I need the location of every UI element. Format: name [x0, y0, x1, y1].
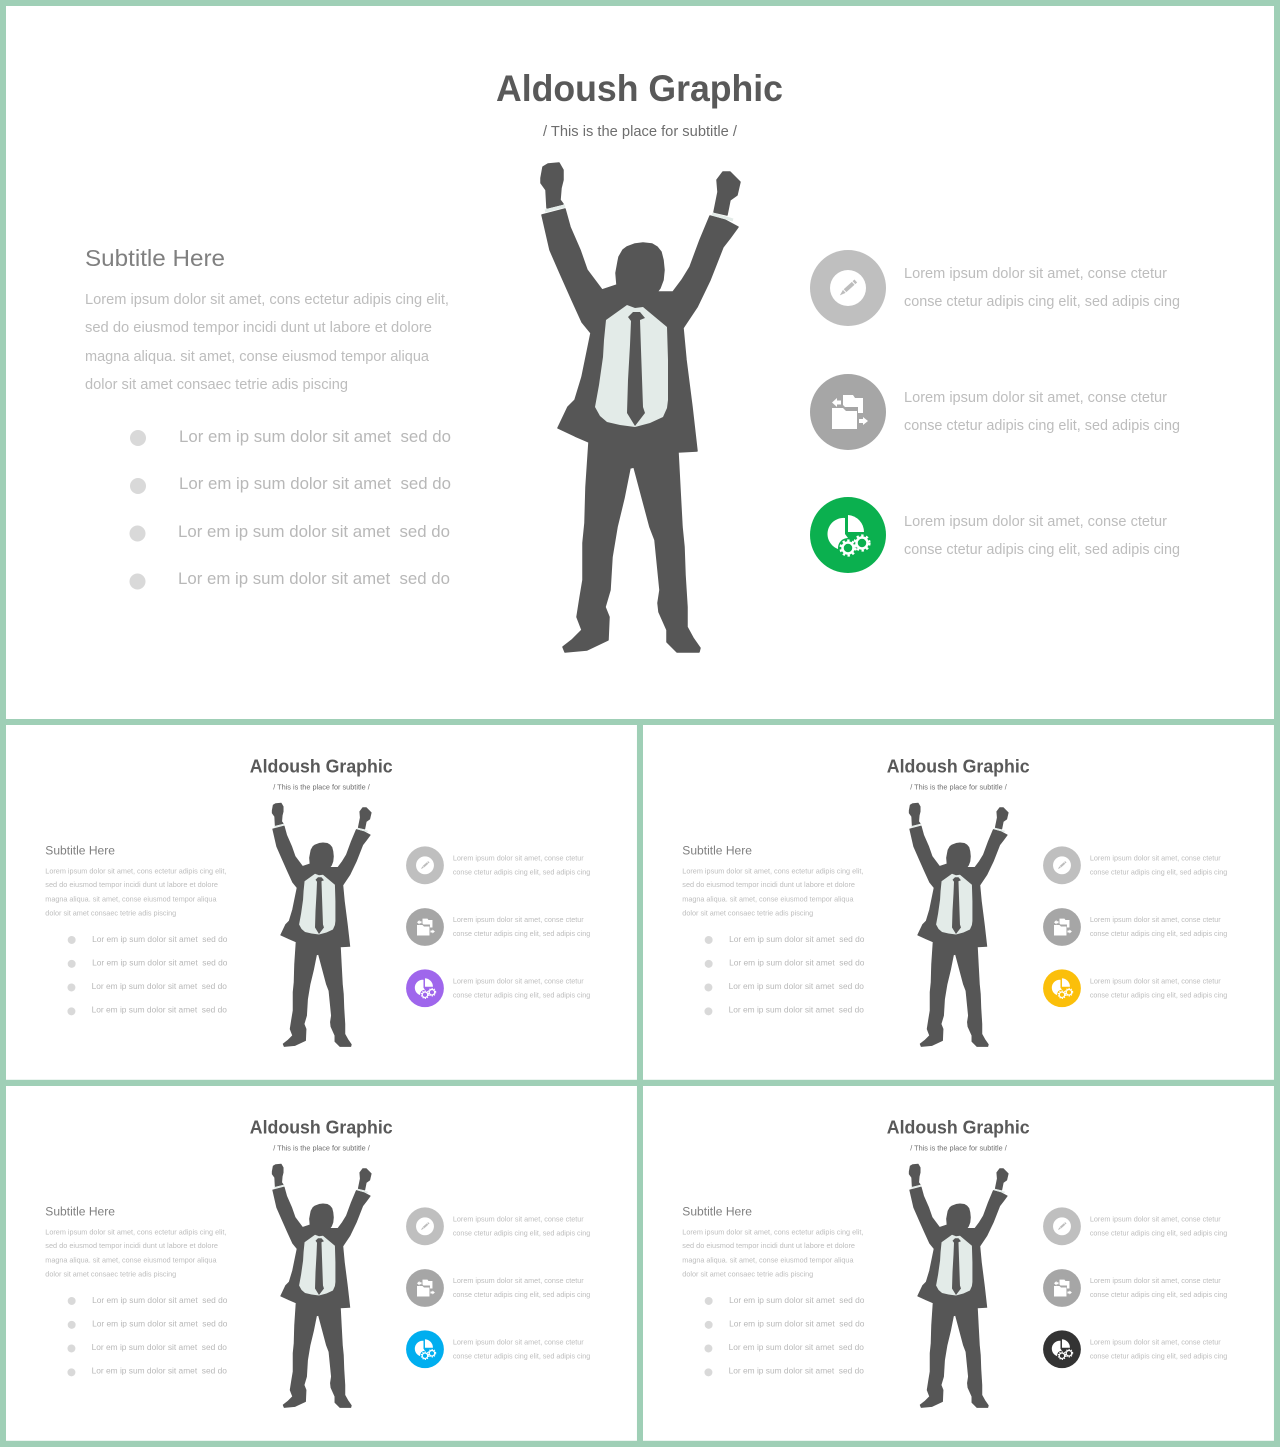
left paragraph: magna aliqua. sit amet, conse eiusmod tempor aliqua	[85, 348, 430, 365]
right text blocks: Lorem ipsum dolor sit amet, conse ctetur	[1090, 915, 1221, 924]
left paragraph: Lorem ipsum dolor sit amet, cons ectetur adipis cing elit,	[45, 866, 226, 875]
left heading: Subtitle Here	[682, 1205, 752, 1218]
right text blocks	[904, 265, 1180, 558]
subtitle: / This is the place for subtitle /	[273, 1144, 371, 1153]
right text blocks: conse ctetur adipis cing elit, sed adipis cing	[904, 293, 1180, 310]
title: Aldoush Graphic	[496, 67, 783, 109]
right text blocks: Lorem ipsum dolor sit amet, conse ctetur	[1090, 1214, 1221, 1223]
left paragraph: dolor sit amet consaec tetrie adis piscing	[682, 1270, 813, 1279]
bullet list: Lor em ip sum dolor sit amet sed do	[92, 982, 227, 991]
left paragraph	[45, 866, 226, 918]
right text blocks: conse ctetur adipis cing elit, sed adipis cing	[453, 1352, 590, 1361]
bullet list: Lor em ip sum dolor sit amet sed do	[729, 935, 865, 944]
bullet list: Lor em ip sum dolor sit amet sed do	[92, 1367, 227, 1376]
left paragraph: dolor sit amet consaec tetrie adis piscing	[85, 376, 348, 393]
right text blocks: Lorem ipsum dolor sit amet, conse ctetur	[904, 513, 1167, 530]
icon: folders	[406, 1269, 444, 1307]
right text blocks: Lorem ipsum dolor sit amet, conse ctetur	[453, 1214, 584, 1223]
right text blocks: Lorem ipsum dolor sit amet, conse ctetur	[904, 389, 1167, 406]
subtitle: / This is the place for subtitle /	[910, 1144, 1008, 1153]
bullet list	[67, 935, 228, 1015]
left paragraph	[682, 866, 863, 918]
right text blocks: conse ctetur adipis cing elit, sed adipis cing	[1090, 867, 1227, 876]
right text blocks: Lorem ipsum dolor sit amet, conse ctetur	[453, 853, 584, 862]
bullet list: Lor em ip sum dolor sit amet sed do	[92, 1319, 228, 1328]
icon: pencil	[1043, 846, 1081, 884]
right text blocks	[1090, 1214, 1227, 1361]
subtitle: / This is the place for subtitle /	[273, 783, 371, 792]
left paragraph	[85, 291, 449, 393]
right text blocks: conse ctetur adipis cing elit, sed adipis cing	[453, 867, 590, 876]
icon: folders	[810, 374, 886, 450]
icon: pie chart and gears	[406, 1330, 444, 1368]
right text blocks: conse ctetur adipis cing elit, sed adipis cing	[453, 929, 590, 938]
right text blocks: conse ctetur adipis cing elit, sed adipis cing	[1090, 1290, 1227, 1299]
right text blocks	[453, 1214, 590, 1361]
bullet list: Lor em ip sum dolor sit amet sed do	[729, 1319, 865, 1328]
left heading: Subtitle Here	[85, 245, 225, 271]
bullet list	[67, 1296, 228, 1376]
icon: pencil	[406, 846, 444, 884]
bullet list: Lor em ip sum dolor sit amet sed do	[92, 958, 228, 967]
left paragraph: magna aliqua. sit amet, conse eiusmod tempor aliqua	[682, 1256, 854, 1265]
left paragraph: Lorem ipsum dolor sit amet, cons ectetur adipis cing elit,	[682, 1227, 863, 1236]
businessman silhouette	[541, 163, 740, 652]
title: Aldoush Graphic	[250, 755, 393, 776]
icon: folders	[406, 908, 444, 946]
bullet list: Lor em ip sum dolor sit amet sed do	[92, 1006, 227, 1015]
bullet list: Lor em ip sum dolor sit amet sed do	[179, 475, 451, 493]
bullet list: Lor em ip sum dolor sit amet sed do	[729, 1296, 865, 1305]
left paragraph: Lorem ipsum dolor sit amet, cons ectetur adipis cing elit,	[682, 866, 863, 875]
subtitle: / This is the place for subtitle /	[543, 123, 738, 140]
icon: pencil	[1043, 1207, 1081, 1245]
icon: pencil	[810, 250, 886, 326]
left paragraph: magna aliqua. sit amet, conse eiusmod tempor aliqua	[45, 1256, 217, 1265]
left paragraph: sed do eiusmod tempor incidi dunt ut labore et dolore	[85, 319, 432, 336]
bullet list: Lor em ip sum dolor sit amet sed do	[179, 428, 451, 446]
businessman silhouette	[272, 1164, 371, 1407]
bullet list: Lor em ip sum dolor sit amet sed do	[729, 1367, 864, 1376]
businessman silhouette	[272, 803, 371, 1046]
left paragraph: sed do eiusmod tempor incidi dunt ut labore et dolore	[682, 880, 855, 889]
bullet list: Lor em ip sum dolor sit amet sed do	[729, 1006, 864, 1015]
right text blocks: Lorem ipsum dolor sit amet, conse ctetur	[453, 977, 584, 986]
icon: pie chart and gears	[810, 497, 886, 573]
bullet list: Lor em ip sum dolor sit amet sed do	[729, 982, 864, 991]
right text blocks: conse ctetur adipis cing elit, sed adipis cing	[1090, 1228, 1227, 1237]
left heading: Subtitle Here	[682, 844, 752, 857]
bullet list: Lor em ip sum dolor sit amet sed do	[178, 570, 450, 588]
right text blocks: conse ctetur adipis cing elit, sed adipis cing	[453, 1228, 590, 1237]
left paragraph	[45, 1227, 226, 1279]
left paragraph: sed do eiusmod tempor incidi dunt ut labore et dolore	[45, 880, 218, 889]
left paragraph	[682, 1227, 863, 1279]
panel: small slide yellow	[643, 725, 1274, 1080]
left paragraph: sed do eiusmod tempor incidi dunt ut labore et dolore	[682, 1241, 855, 1250]
right text blocks: conse ctetur adipis cing elit, sed adipis cing	[453, 991, 590, 1000]
icon: folders	[1043, 908, 1081, 946]
panel: small slide black	[643, 1086, 1274, 1441]
left paragraph: dolor sit amet consaec tetrie adis piscing	[682, 909, 813, 918]
title: Aldoush Graphic	[887, 1116, 1030, 1137]
title: Aldoush Graphic	[250, 1116, 393, 1137]
right text blocks: Lorem ipsum dolor sit amet, conse ctetur	[1090, 1276, 1221, 1285]
icon: pencil	[406, 1207, 444, 1245]
left paragraph: magna aliqua. sit amet, conse eiusmod tempor aliqua	[682, 895, 854, 904]
right text blocks: Lorem ipsum dolor sit amet, conse ctetur	[1090, 1338, 1221, 1347]
right text blocks: Lorem ipsum dolor sit amet, conse ctetur	[904, 265, 1167, 282]
right text blocks: Lorem ipsum dolor sit amet, conse ctetur	[1090, 853, 1221, 862]
right text blocks: conse ctetur adipis cing elit, sed adipis cing	[1090, 929, 1227, 938]
bullet list	[704, 935, 865, 1015]
left paragraph: magna aliqua. sit amet, conse eiusmod tempor aliqua	[45, 895, 217, 904]
icon: pie chart and gears	[406, 969, 444, 1007]
left paragraph: Lorem ipsum dolor sit amet, cons ectetur adipis cing elit,	[85, 291, 449, 308]
icon: folders	[1043, 1269, 1081, 1307]
left paragraph: dolor sit amet consaec tetrie adis piscing	[45, 909, 176, 918]
left paragraph: sed do eiusmod tempor incidi dunt ut labore et dolore	[45, 1241, 218, 1250]
right text blocks	[1090, 853, 1227, 1000]
right text blocks: conse ctetur adipis cing elit, sed adipis cing	[904, 541, 1180, 558]
bullet list: Lor em ip sum dolor sit amet sed do	[729, 1343, 864, 1352]
panel: small slide purple	[6, 725, 637, 1080]
bullet list: Lor em ip sum dolor sit amet sed do	[92, 1343, 227, 1352]
right text blocks	[453, 853, 590, 1000]
bullet list: Lor em ip sum dolor sit amet sed do	[92, 1296, 228, 1305]
bullet list: Lor em ip sum dolor sit amet sed do	[92, 935, 228, 944]
subtitle: / This is the place for subtitle /	[910, 783, 1008, 792]
right text blocks: Lorem ipsum dolor sit amet, conse ctetur	[453, 1276, 584, 1285]
right text blocks: conse ctetur adipis cing elit, sed adipis cing	[904, 417, 1180, 434]
left heading: Subtitle Here	[45, 844, 115, 857]
panel: small slide blue	[6, 1086, 637, 1441]
right text blocks: Lorem ipsum dolor sit amet, conse ctetur	[453, 1338, 584, 1347]
right text blocks: conse ctetur adipis cing elit, sed adipis cing	[453, 1290, 590, 1299]
icon: pie chart and gears	[1043, 1330, 1081, 1368]
left paragraph: dolor sit amet consaec tetrie adis piscing	[45, 1270, 176, 1279]
bullet list	[704, 1296, 865, 1376]
bullet list: Lor em ip sum dolor sit amet sed do	[729, 958, 865, 967]
right text blocks: Lorem ipsum dolor sit amet, conse ctetur	[453, 915, 584, 924]
bullet list	[130, 428, 451, 590]
right text blocks: conse ctetur adipis cing elit, sed adipis cing	[1090, 991, 1227, 1000]
left paragraph: Lorem ipsum dolor sit amet, cons ectetur adipis cing elit,	[45, 1227, 226, 1236]
right text blocks: Lorem ipsum dolor sit amet, conse ctetur	[1090, 977, 1221, 986]
panel: main slide green	[6, 6, 1274, 719]
right text blocks: conse ctetur adipis cing elit, sed adipis cing	[1090, 1352, 1227, 1361]
businessman silhouette	[909, 1164, 1008, 1407]
title: Aldoush Graphic	[887, 755, 1030, 776]
businessman silhouette	[909, 803, 1008, 1046]
bullet list: Lor em ip sum dolor sit amet sed do	[178, 523, 450, 541]
icon: pie chart and gears	[1043, 969, 1081, 1007]
left heading: Subtitle Here	[45, 1205, 115, 1218]
